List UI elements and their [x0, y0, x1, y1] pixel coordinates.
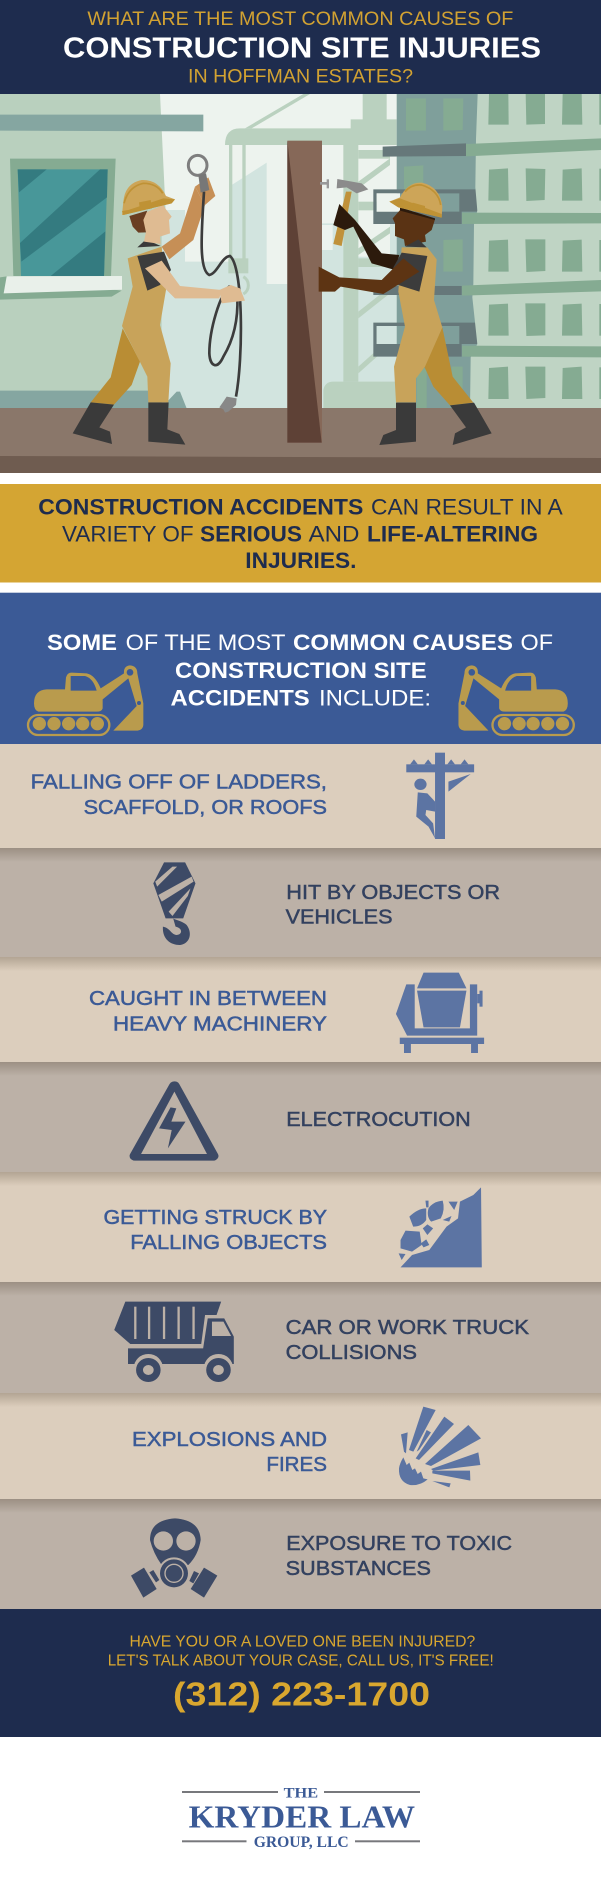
icon: rockslide — [399, 1187, 482, 1267]
row: caught in machinery: CAUGHT IN BETWEEN — [89, 987, 327, 1010]
row: electrocution: ELECTROCUTION — [286, 1108, 471, 1131]
row: toxic substances — [0, 1499, 601, 1609]
tower with scaffolding — [397, 94, 480, 408]
panel: common causes heading: COMMON CAUSES — [293, 630, 513, 655]
row: struck by falling objects — [0, 1172, 601, 1282]
panel: common causes heading: OF — [520, 630, 553, 655]
panel: common causes heading: ACCIDENTS — [170, 685, 310, 710]
row: truck collisions — [0, 1282, 601, 1393]
callout: gold statement: VARIETY OF — [62, 521, 194, 546]
icon: right excavator — [458, 665, 574, 735]
call to action footer: LET'S TALK ABOUT YOUR CASE, CALL US, IT'S FREE! — [108, 1652, 494, 1669]
row: falling off ladders: FALLING OFF OF LADDERS, — [31, 770, 327, 793]
icon: cement mixer — [396, 973, 484, 1053]
logo: The Kryder Law Group: THE — [284, 1785, 318, 1801]
row: caught in machinery: HEAVY MACHINERY — [113, 1012, 327, 1035]
icon: worker climbing utility pole — [406, 753, 474, 839]
row: falling off ladders: SCAFFOLD, OR ROOFS — [84, 796, 327, 819]
title banner: IN HOFFMAN ESTATES? — [188, 66, 413, 88]
panel: common causes heading: CONSTRUCTION SITE — [175, 658, 427, 683]
call to action footer: HAVE YOU OR A LOVED ONE BEEN INJURED? — [130, 1633, 475, 1650]
title banner — [0, 0, 601, 94]
icon: dump truck — [114, 1302, 234, 1382]
callout: gold statement: CONSTRUCTION ACCIDENTS — [38, 495, 363, 520]
icon: gas mask — [131, 1518, 217, 1598]
hero illustration: two construction workers — [0, 94, 601, 473]
title banner: CONSTRUCTION SITE INJURIES — [63, 32, 541, 64]
row: electrocution — [0, 1062, 601, 1172]
row: truck collisions: COLLISIONS — [286, 1341, 417, 1364]
callout: gold statement: LIFE-ALTERING — [367, 521, 538, 546]
row: explosions and fires: FIRES — [266, 1453, 327, 1476]
row: truck collisions: CAR OR WORK TRUCK — [286, 1316, 529, 1339]
row: hit by objects: HIT BY OBJECTS OR — [286, 881, 500, 904]
logo: The Kryder Law Group — [182, 1785, 420, 1851]
row: explosions and fires — [0, 1393, 601, 1499]
icon: explosion — [399, 1407, 481, 1487]
row: toxic substances: SUBSTANCES — [286, 1557, 431, 1580]
callout: gold statement: INJURIES. — [245, 548, 356, 573]
row: caught in machinery — [0, 957, 601, 1062]
callout: gold statement: AND — [308, 521, 360, 546]
row: struck by falling objects: GETTING STRUCK BY — [104, 1206, 327, 1229]
panel: common causes heading: OF THE MOST — [126, 630, 286, 655]
icon: high voltage warning triangle — [135, 1086, 213, 1156]
crane and background scaffold — [162, 94, 397, 408]
callout: gold statement: SERIOUS — [200, 521, 302, 546]
row: toxic substances: EXPOSURE TO TOXIC — [286, 1532, 512, 1555]
right worker — [319, 179, 492, 445]
panel: common causes heading: SOME — [47, 630, 117, 655]
panel: common causes heading: INCLUDE: — [319, 685, 431, 710]
icon: crane hook — [153, 862, 195, 945]
ground — [0, 408, 601, 473]
logo: The Kryder Law Group: KRYDER LAW — [189, 1798, 415, 1834]
wooden post — [287, 141, 322, 443]
phone number: (312) 223-1700 — [173, 1676, 430, 1713]
row: hit by objects — [0, 848, 601, 957]
callout: gold statement — [0, 484, 601, 582]
electric cable and plug — [188, 155, 241, 413]
left building with window — [0, 94, 203, 408]
icon: left excavator — [28, 665, 143, 735]
right building — [462, 94, 601, 409]
callout: gold statement: CAN RESULT IN A — [371, 495, 563, 520]
panel: common causes heading — [0, 593, 601, 744]
left worker — [73, 155, 245, 445]
title banner: WHAT ARE THE MOST COMMON CAUSES OF — [87, 8, 513, 30]
call to action footer — [0, 1609, 601, 1737]
row: explosions and fires: EXPLOSIONS AND — [132, 1428, 327, 1451]
logo: The Kryder Law Group: GROUP, LLC — [254, 1834, 349, 1851]
row: hit by objects: VEHICLES — [286, 906, 392, 929]
row: struck by falling objects: FALLING OBJECTS — [130, 1231, 327, 1254]
row: falling off ladders — [0, 744, 601, 848]
